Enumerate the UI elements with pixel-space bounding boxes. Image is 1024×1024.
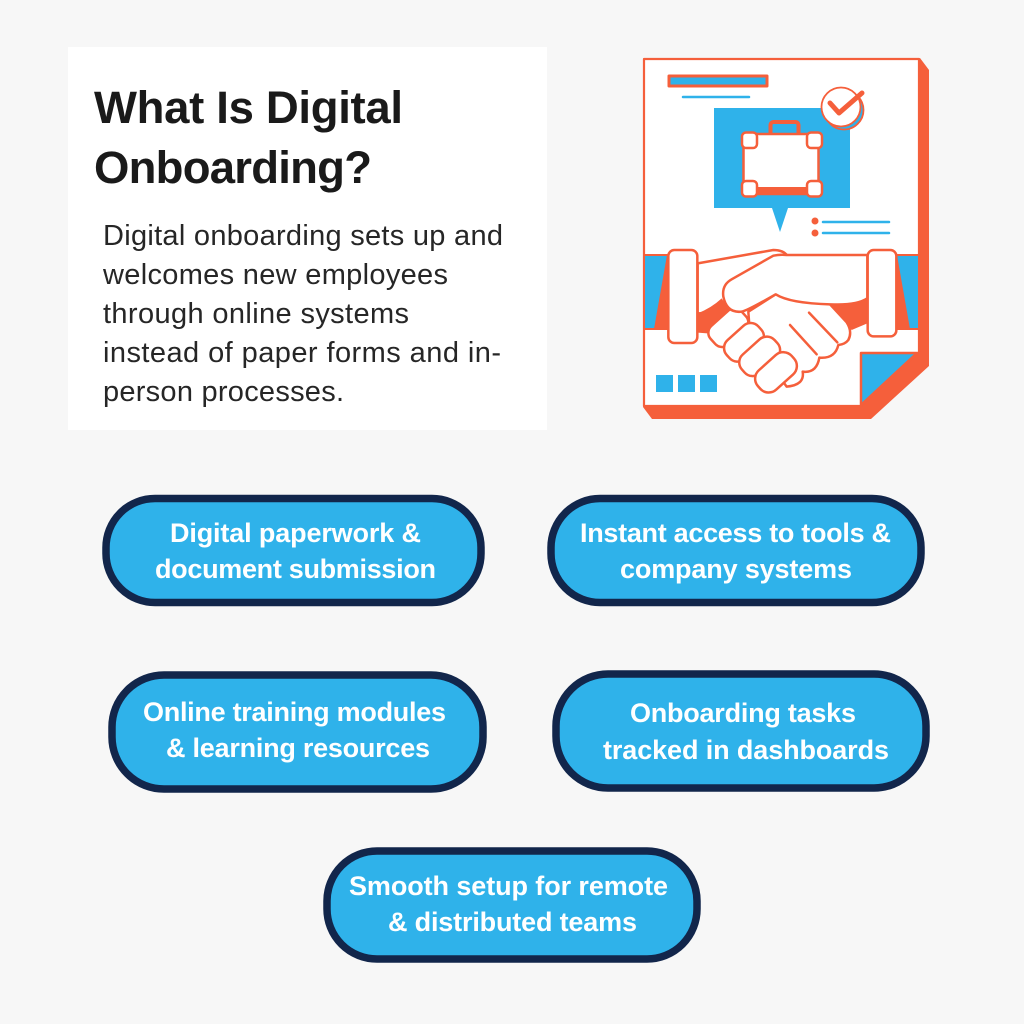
pill: instant access bbox=[551, 498, 921, 602]
text block: definition: instead of paper forms and in- bbox=[103, 337, 501, 369]
document shadow bbox=[643, 58, 929, 419]
panel: intro bbox=[68, 47, 547, 430]
page fold bbox=[861, 353, 917, 405]
icon: check badge bbox=[822, 88, 864, 130]
pill: onboarding tasks: Onboarding tasks bbox=[630, 698, 856, 728]
pill: onboarding tasks: tracked in dashboards bbox=[603, 735, 889, 765]
text block: definition: person processes. bbox=[103, 376, 344, 408]
pill: online training bbox=[112, 675, 483, 789]
title: What Is Digital bbox=[94, 82, 403, 133]
pill: digital paperwork: document submission bbox=[155, 554, 436, 584]
header bar bbox=[669, 76, 767, 86]
pill: onboarding tasks bbox=[556, 674, 926, 788]
subheader line bbox=[683, 96, 749, 98]
illustration: onboarding document with handshake bbox=[643, 58, 929, 419]
pill: smooth setup bbox=[327, 851, 697, 959]
pill: smooth setup: & distributed teams bbox=[388, 907, 637, 937]
document page bbox=[644, 59, 919, 406]
page indicator squares bbox=[656, 375, 717, 392]
icon: briefcase bbox=[742, 122, 822, 196]
title: Onboarding? bbox=[94, 142, 372, 193]
blue band behind handshake bbox=[645, 255, 918, 329]
title bbox=[94, 82, 403, 193]
pill: instant access: Instant access to tools & bbox=[580, 518, 891, 548]
handshake bbox=[668, 250, 896, 397]
speech bubble bbox=[714, 108, 850, 232]
pill: digital paperwork bbox=[106, 498, 481, 602]
text block: definition: through online systems bbox=[103, 298, 409, 330]
pill: instant access: company systems bbox=[620, 554, 852, 584]
pill: smooth setup: Smooth setup for remote bbox=[349, 871, 668, 901]
text block: definition: Digital onboarding sets up and bbox=[103, 220, 503, 252]
pill: online training: & learning resources bbox=[166, 733, 430, 763]
pill: digital paperwork: Digital paperwork & bbox=[170, 518, 421, 548]
text block: definition bbox=[102, 220, 503, 408]
pill: online training: Online training modules bbox=[143, 697, 446, 727]
bullet lines bbox=[812, 218, 889, 236]
text block: definition: welcomes new employees bbox=[102, 259, 448, 291]
